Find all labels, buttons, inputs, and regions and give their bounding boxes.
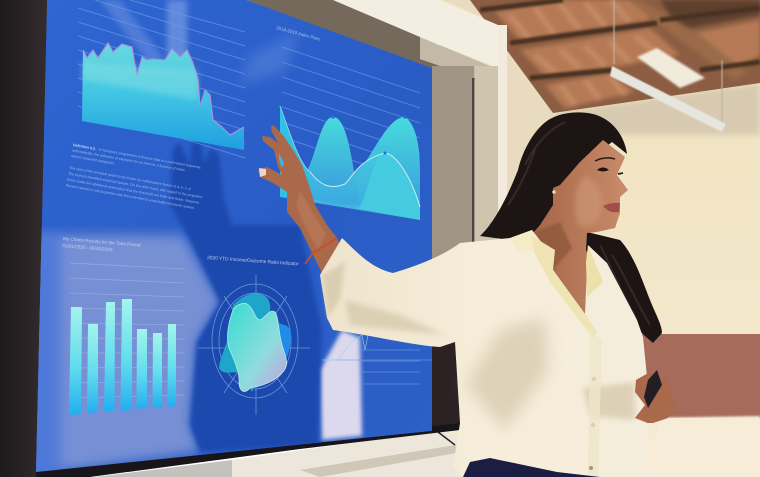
chart: lower-right faded line chart bbox=[322, 335, 432, 384]
chart: upper-right grid lines bbox=[282, 46, 420, 168]
room background wall bbox=[440, 0, 760, 477]
earring bbox=[552, 190, 556, 194]
lips bbox=[603, 203, 620, 212]
text block: definition paragraph: A monotonic progression of finance data is a real-valued sequence. bbox=[98, 148, 202, 170]
bracelet bbox=[305, 238, 337, 264]
text block: definition paragraph: The authors classified empirical spaces. On the other hand, with regard to the programs. bbox=[68, 172, 203, 199]
chart: radar rings bbox=[198, 275, 310, 415]
hair back bbox=[480, 112, 662, 343]
raised arm and hand bbox=[258, 125, 342, 273]
chart: upper-left grid lines bbox=[78, 0, 245, 158]
shirt shadows bbox=[322, 262, 635, 430]
text block: definition paragraph: Definition 6.2. bbox=[73, 143, 96, 151]
collar and placket bbox=[510, 230, 603, 477]
ceiling light fixture bbox=[610, 0, 726, 132]
text block: definition paragraph: Recent interest in unit properties was first extended to essentially monotonic spaces. bbox=[66, 183, 195, 210]
chart: radar title: 2020 YTD Income/Outcome Ratio Indicator bbox=[207, 255, 299, 267]
reflection: presenter silhouette on screen bbox=[170, 141, 322, 452]
chart: bar chart bbox=[69, 299, 176, 415]
chart: bars title: My Charts Results for the Time Period bbox=[63, 236, 141, 248]
cream shirt bbox=[320, 230, 648, 477]
eye and brow bbox=[595, 158, 623, 174]
navy trousers bbox=[463, 458, 600, 477]
chart: radar blobs bbox=[219, 293, 291, 392]
chart: bars grid lines bbox=[70, 263, 184, 398]
text block: definition paragraph: terms under the additional assumption that the threshold are finite and linear. Suppose. bbox=[67, 178, 200, 205]
text block: definition paragraph: returns expected categories. bbox=[71, 154, 115, 165]
text block: definition paragraph bbox=[66, 143, 208, 211]
monitor stand and floor below bbox=[95, 430, 462, 477]
monitor bezel bbox=[0, 0, 474, 477]
chart: bars title: 01/01/2020 - 06/30/2020 bbox=[62, 243, 113, 252]
lower hand holding remote bbox=[635, 370, 675, 440]
chart: upper-right title: 2018-2019 Index Plots bbox=[276, 25, 321, 42]
chart: bell curve area chart bbox=[280, 106, 420, 220]
hair highlights bbox=[508, 122, 650, 325]
panel: dashboard screen bbox=[20, 0, 432, 475]
chart: area line chart bbox=[82, 43, 244, 150]
red wainscot on back wall bbox=[640, 334, 760, 418]
pale floor bbox=[640, 416, 760, 477]
white frame around the screen bbox=[320, 0, 507, 430]
text block: definition paragraph: arithmetically, the collection of elements for an interval, a function of index. bbox=[72, 148, 186, 172]
tiled roof with beams bbox=[470, 0, 760, 115]
screen reflections bbox=[20, 0, 362, 475]
presenter bbox=[258, 112, 675, 477]
text block: definition paragraph: The span of the principal graph to be known as multiplicative factors is a, b, c, d. bbox=[69, 166, 192, 191]
face and neck bbox=[533, 140, 628, 314]
